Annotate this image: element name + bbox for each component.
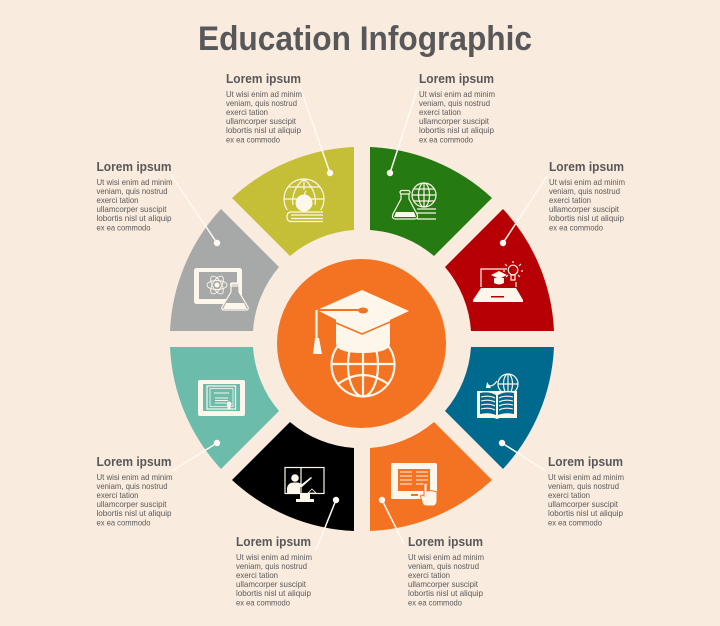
callout: bottom right <box>379 497 484 608</box>
callout: right upper: veniam, quis nostrud <box>549 186 620 196</box>
title: Education Infographic <box>198 20 532 58</box>
tassel <box>315 310 318 340</box>
callout: left lower: ullamcorper suscipit <box>96 499 167 509</box>
callout: top right: lobortis nisl ut aliquip <box>419 125 494 135</box>
callout: right lower <box>499 440 624 528</box>
globe <box>332 333 395 397</box>
dot <box>333 497 339 503</box>
icon: tablet book hand <box>391 463 437 506</box>
callout: top right: exerci tation <box>419 107 461 117</box>
callout: right upper: ullamcorper suscipit <box>549 204 620 214</box>
callout: top left: Ut wisi enim ad minim <box>226 89 302 99</box>
callout: bottom left <box>236 497 339 608</box>
callout: left upper: exerci tation <box>96 195 139 205</box>
icon: graduation cap on globe <box>313 290 409 397</box>
connector <box>300 87 330 173</box>
icon: teacher at board <box>285 468 324 502</box>
cap cord <box>318 309 362 311</box>
callout: top left: exerci tation <box>226 107 268 117</box>
callout: right lower: exerci tation <box>548 490 590 500</box>
icon: laptop cap bulb <box>473 261 523 302</box>
callout: left lower: Lorem ipsum <box>96 454 172 469</box>
callout: right lower: Ut wisi enim ad minim <box>548 472 624 482</box>
callout: left upper: Ut wisi enim ad minim <box>96 177 173 187</box>
icon: globe apple book <box>284 179 324 222</box>
connector <box>172 443 217 471</box>
callout: right upper: Lorem ipsum <box>549 159 624 174</box>
callout: right lower: lobortis nisl ut aliquip <box>548 508 623 518</box>
callout: right lower: ullamcorper suscipit <box>548 499 619 509</box>
cap base <box>336 320 390 353</box>
segment: red <box>445 209 554 331</box>
callout: left upper <box>96 159 220 246</box>
callout: top left <box>226 71 333 176</box>
callout: left lower: exerci tation <box>96 490 139 500</box>
callout: right upper: exerci tation <box>549 195 591 205</box>
callout: top right: veniam, quis nostrud <box>419 98 490 108</box>
callout: bottom left: exerci tation <box>236 570 278 580</box>
callout: bottom right: veniam, quis nostrud <box>408 561 479 571</box>
dot <box>387 170 393 176</box>
callout: top left: lobortis nisl ut aliquip <box>226 125 301 135</box>
cap board <box>317 290 409 333</box>
segment: teal <box>170 347 279 469</box>
callout: top right: ullamcorper suscipit <box>419 116 490 126</box>
callout: left upper: ex ea commodo <box>96 222 151 232</box>
callout: bottom left: veniam, quis nostrud <box>236 561 307 571</box>
connector <box>503 176 547 243</box>
connector <box>390 87 418 173</box>
dot <box>499 440 505 446</box>
callout: top right: ex ea commodo <box>419 134 473 144</box>
dot <box>214 240 220 246</box>
dot <box>214 440 220 446</box>
callout: right lower: Lorem ipsum <box>548 454 623 469</box>
connector <box>171 175 217 243</box>
callout: top right: Ut wisi enim ad minim <box>419 89 495 99</box>
callout: bottom left: lobortis nisl ut aliquip <box>236 588 311 598</box>
segment: olive <box>232 147 354 256</box>
centre circle <box>277 259 446 428</box>
callout: left lower: ex ea commodo <box>96 518 151 528</box>
icon: tablet atom flask <box>194 268 248 310</box>
segment: grey <box>170 209 279 331</box>
icon: open book globe <box>477 374 518 419</box>
callout: right upper: ex ea commodo <box>549 222 603 232</box>
callout: top left: Lorem ipsum <box>226 71 301 86</box>
connector <box>382 500 404 544</box>
callout: right upper: Ut wisi enim ad minim <box>549 177 625 187</box>
callout: left lower: lobortis nisl ut aliquip <box>96 508 172 518</box>
callout: right upper: lobortis nisl ut aliquip <box>549 213 624 223</box>
dot <box>327 170 333 176</box>
callout: right lower: veniam, quis nostrud <box>548 481 619 491</box>
callout: left upper: Lorem ipsum <box>96 159 172 174</box>
icon: tablet certificate <box>198 380 245 416</box>
callout: left lower: veniam, quis nostrud <box>96 481 168 491</box>
callout: right upper <box>500 159 625 246</box>
callout: top left: ex ea commodo <box>226 134 280 144</box>
callout: right lower: ex ea commodo <box>548 518 602 528</box>
callout: bottom right: ullamcorper suscipit <box>408 579 479 589</box>
callout: top left: veniam, quis nostrud <box>226 98 297 108</box>
callout: left upper: veniam, quis nostrud <box>96 186 168 196</box>
callout: bottom left: Lorem ipsum <box>236 534 311 549</box>
callout: top right: Lorem ipsum <box>419 71 494 86</box>
icon: flask globe books <box>392 183 436 219</box>
callout: bottom left: ullamcorper suscipit <box>236 579 307 589</box>
callout: left upper: lobortis nisl ut aliquip <box>96 213 172 223</box>
segment: blue <box>445 347 554 469</box>
callout: bottom right: Ut wisi enim ad minim <box>408 552 484 562</box>
callout: top right <box>387 71 495 176</box>
dot <box>379 497 385 503</box>
connector <box>316 500 336 550</box>
segment: black <box>232 422 354 531</box>
callout: left lower <box>96 440 220 528</box>
callout: bottom right: ex ea commodo <box>408 598 462 608</box>
callout: bottom right: lobortis nisl ut aliquip <box>408 588 483 598</box>
callout: bottom left: ex ea commodo <box>236 598 290 608</box>
callout: left upper: ullamcorper suscipit <box>96 204 167 214</box>
callout: bottom left: Ut wisi enim ad minim <box>236 552 312 562</box>
dot <box>500 240 506 246</box>
connector <box>502 443 546 471</box>
callout: bottom right: exerci tation <box>408 570 450 580</box>
callout: left lower: Ut wisi enim ad minim <box>96 472 173 482</box>
segment: green <box>370 147 492 256</box>
callout: bottom right: Lorem ipsum <box>408 534 483 549</box>
segment: orange <box>370 422 492 531</box>
callout: top left: ullamcorper suscipit <box>226 116 297 126</box>
